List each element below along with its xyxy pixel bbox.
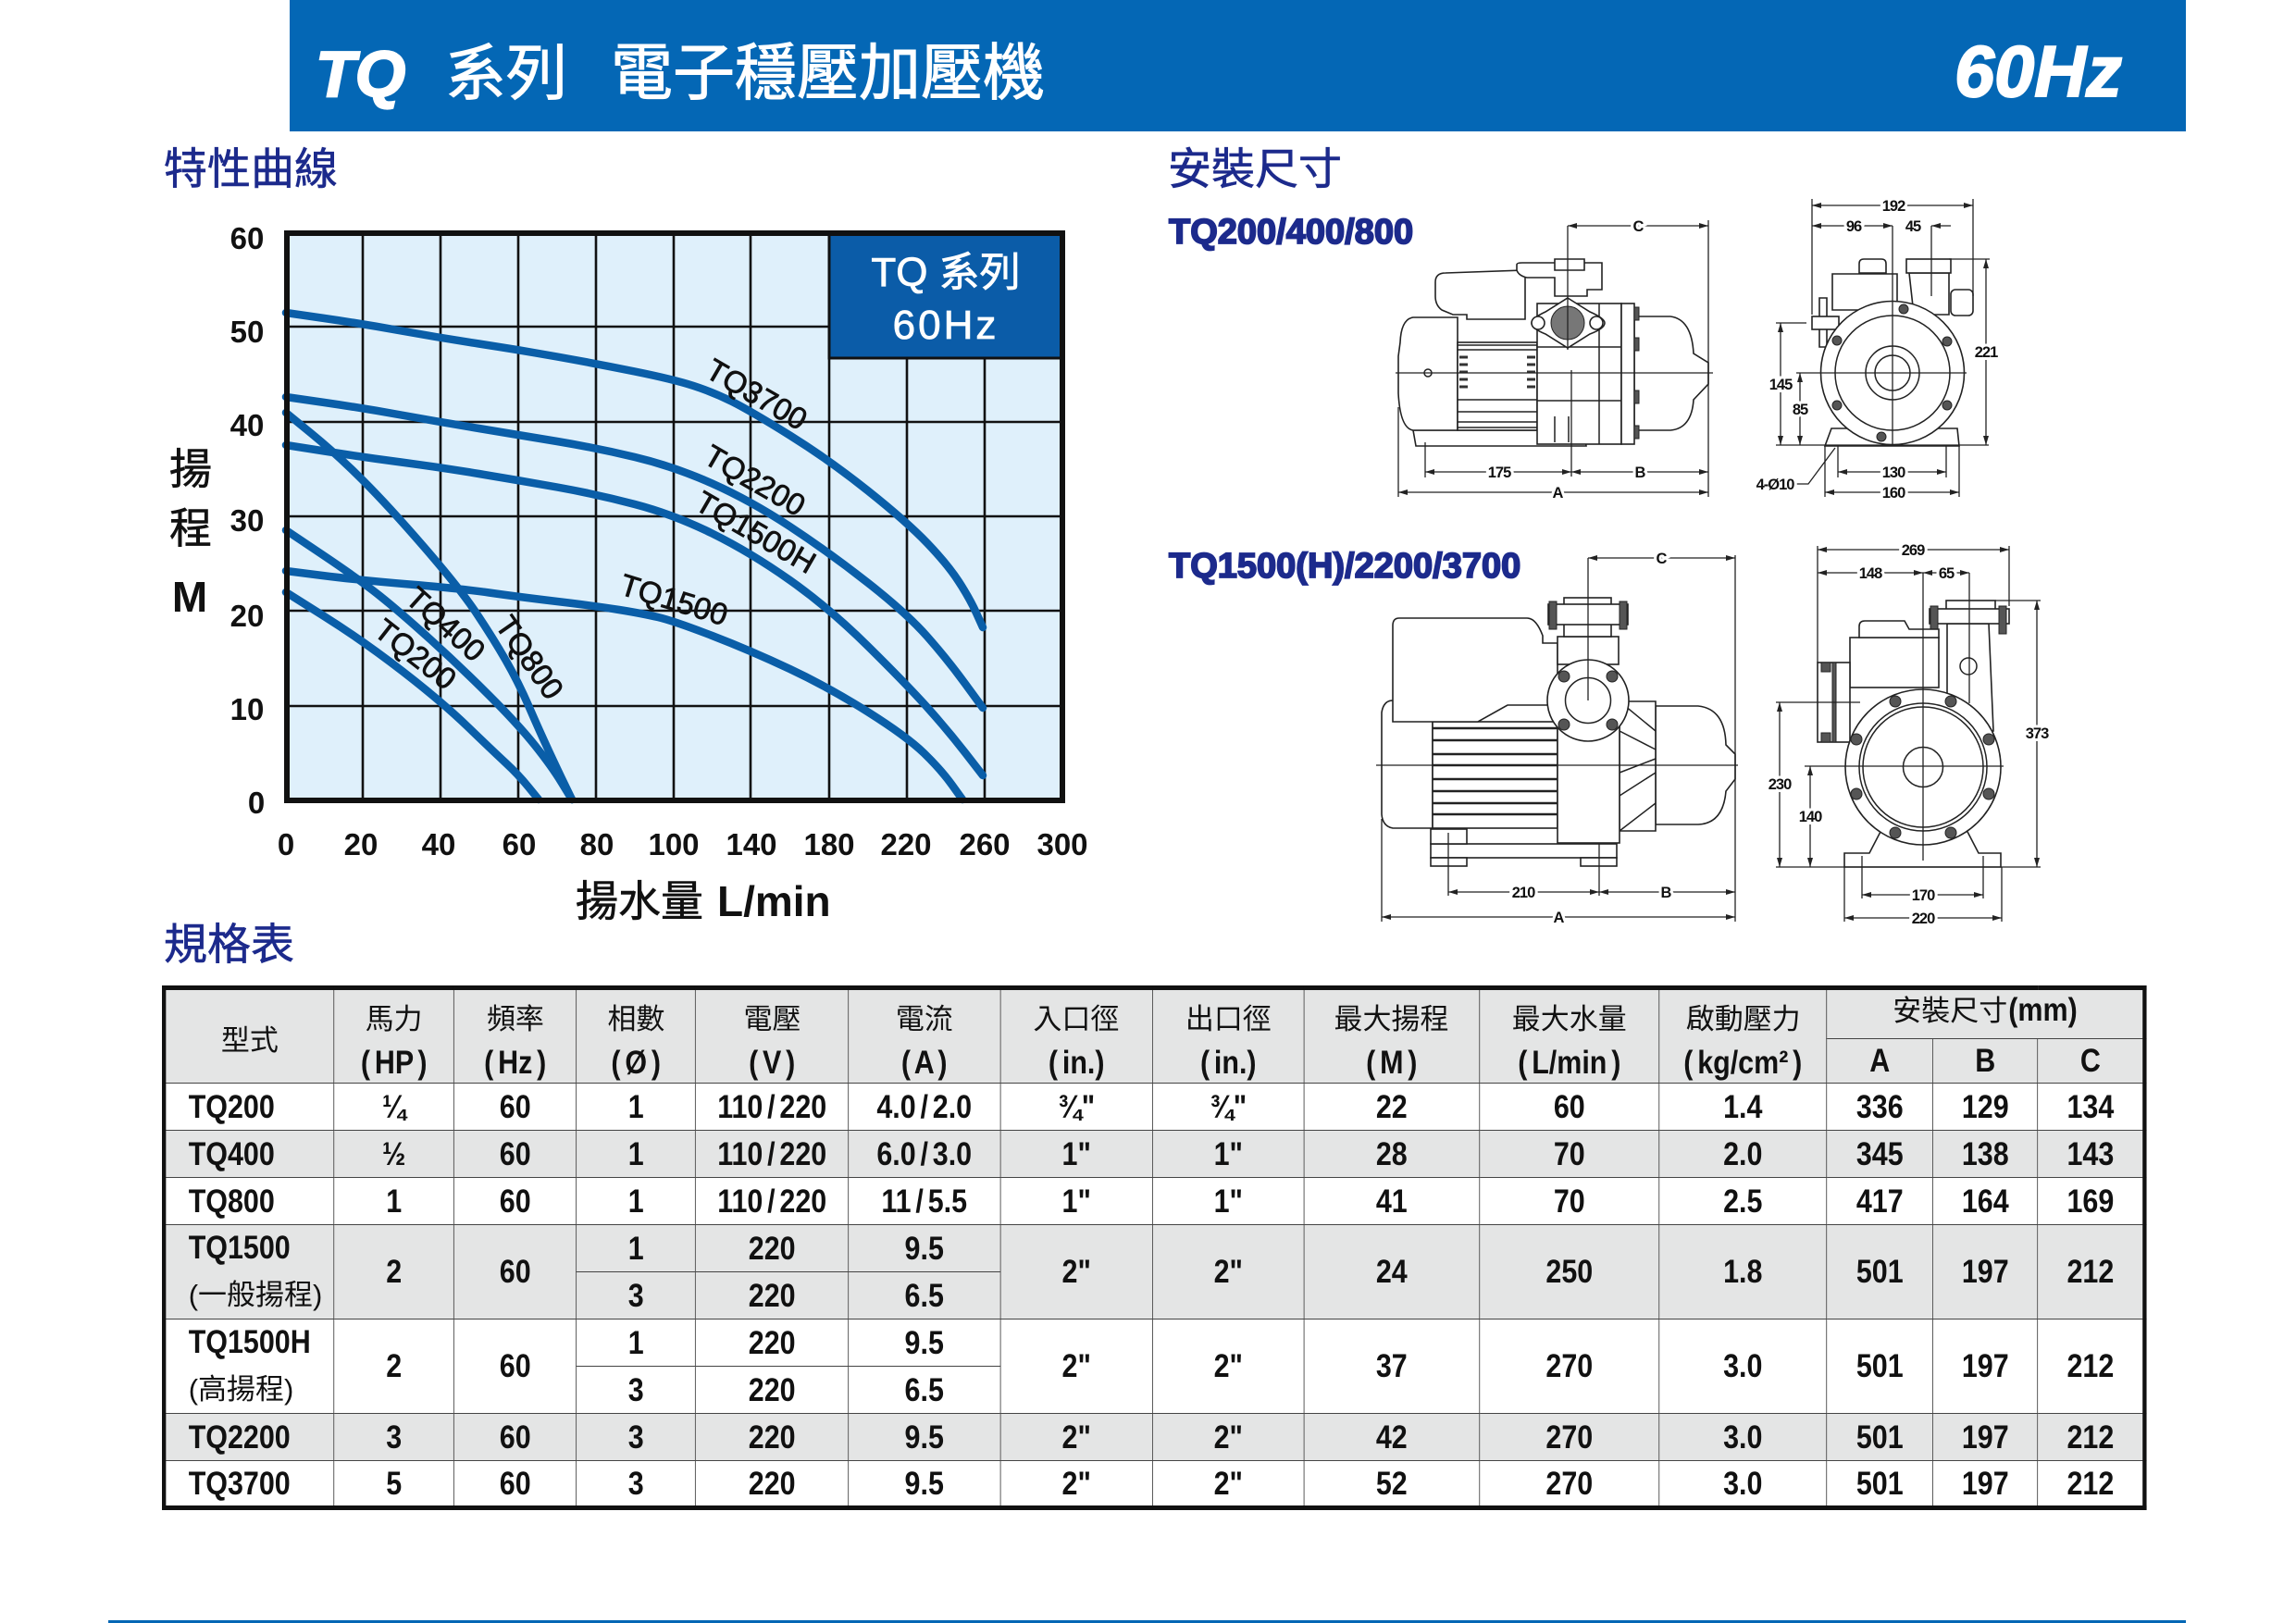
- y axis ticks: 0: [248, 786, 265, 820]
- row: TQ200: ¾": [1058, 1088, 1095, 1125]
- row: TQ3700: 197: [1962, 1466, 2009, 1501]
- row: TQ1500: [167, 1225, 2142, 1319]
- row: TQ800: 41: [1376, 1183, 1408, 1220]
- header banner: 60Hz: [1955, 32, 2122, 112]
- axis lines: [1805, 573, 2004, 861]
- row: TQ3700: 220: [749, 1466, 796, 1501]
- axis lines: [1376, 558, 1738, 896]
- row: TQ2200: 212: [2066, 1419, 2114, 1455]
- plot background: [287, 233, 1062, 800]
- row: TQ1500H: 9.5: [905, 1325, 944, 1360]
- table header row: 最大揚程: [1334, 1003, 1449, 1035]
- row: TQ800: TQ800: [189, 1183, 275, 1220]
- row: TQ3700: 212: [2066, 1466, 2114, 1501]
- row: TQ800: 1": [1214, 1183, 1243, 1220]
- dimension lines: B: [1635, 465, 1646, 481]
- y axis ticks: [230, 221, 265, 820]
- row: TQ1500: 60: [500, 1254, 531, 1290]
- table header row: A: [1869, 1043, 1890, 1079]
- pump body outline: [1812, 259, 1973, 446]
- dimension lines: 96: [1846, 218, 1862, 235]
- row: TQ1500: TQ1500: [189, 1230, 291, 1266]
- row: TQ800: 164: [1962, 1183, 2009, 1220]
- dimension lines: 160: [1882, 485, 1905, 502]
- axis lines: [1396, 226, 1713, 477]
- dimension lines: C: [1633, 218, 1644, 235]
- curve labels: [368, 352, 822, 705]
- row: TQ2200: [167, 1414, 2142, 1460]
- x axis title: L/min: [717, 877, 831, 925]
- dimension lines: 4-Ø10: [1756, 477, 1794, 493]
- row: TQ200: 110 / 220: [717, 1088, 826, 1125]
- row: TQ3700: 2": [1062, 1466, 1091, 1501]
- row: TQ400: 138: [1962, 1136, 2009, 1171]
- y axis ticks: 10: [230, 692, 264, 726]
- row: TQ400: 1: [628, 1136, 644, 1171]
- dimension lines: [1756, 198, 1998, 502]
- row: TQ3700: 9.5: [905, 1466, 944, 1501]
- row: TQ1500: 2": [1214, 1254, 1243, 1290]
- drawing: large pump front view: [1769, 542, 2049, 927]
- y axis ticks: 50: [230, 315, 264, 349]
- table header row: 6.5: [905, 1371, 944, 1408]
- pump body outline: [1398, 259, 1708, 446]
- row: TQ3700: 5: [386, 1466, 402, 1501]
- specification table: [162, 985, 2147, 1510]
- curve: TQ400: [286, 530, 572, 799]
- row: TQ2200: 501: [1856, 1419, 1904, 1455]
- table header row: ( M ): [1366, 1044, 1417, 1081]
- row: TQ1500H: 3.0: [1723, 1348, 1762, 1384]
- row: TQ2200: 60: [500, 1419, 531, 1455]
- table header row: [167, 990, 2142, 1501]
- table header row: 最大水量: [1512, 1003, 1627, 1035]
- dimension lines: [1398, 218, 1708, 502]
- row: TQ1500H: 37: [1376, 1348, 1408, 1384]
- header banner: 電子穩壓加壓機: [611, 39, 1045, 108]
- x axis ticks: 60: [503, 827, 536, 861]
- heading: performance curves: 特性曲線: [164, 144, 338, 193]
- heading: specification table: 規格表: [164, 920, 294, 969]
- drawing: small pump front view: [1756, 198, 1998, 502]
- row: TQ800: 1: [386, 1183, 402, 1220]
- row: TQ3700: TQ3700: [189, 1466, 291, 1501]
- x axis ticks: 20: [344, 827, 378, 861]
- row: TQ400: 2.0: [1723, 1136, 1762, 1171]
- x axis ticks: 80: [580, 827, 614, 861]
- row: TQ200: 22: [1376, 1088, 1408, 1125]
- y axis ticks: 40: [230, 408, 264, 442]
- flange bolts: [1851, 696, 1994, 838]
- row: TQ3700: 270: [1545, 1466, 1593, 1501]
- row: TQ800: 169: [2066, 1183, 2114, 1220]
- table header row: 220: [749, 1277, 796, 1314]
- x axis title: [576, 877, 831, 925]
- drawing: large pump side view: [1376, 551, 1738, 926]
- row: TQ800: 1: [628, 1183, 644, 1220]
- row: TQ3700: 3.0: [1723, 1466, 1762, 1501]
- performance curve chart: [169, 221, 1088, 925]
- table header row: ( kg/cm² ): [1683, 1044, 1802, 1081]
- row: TQ2200: 9.5: [905, 1419, 944, 1455]
- row: TQ1500H: 220: [749, 1325, 796, 1360]
- header banner: 系列: [445, 39, 567, 107]
- table header row: 電壓: [743, 1003, 800, 1035]
- x axis ticks: 300: [1036, 827, 1088, 861]
- legend box: [829, 233, 1062, 358]
- row: TQ200: 1.4: [1723, 1088, 1762, 1125]
- plot frame: [287, 233, 1062, 800]
- dimension lines: 175: [1488, 465, 1511, 481]
- row: TQ1500H: 2: [386, 1348, 402, 1384]
- model label: TQ1500(H)/2200/3700: TQ1500(H)/2200/3700: [1169, 547, 1520, 586]
- dimension lines: 65: [1939, 565, 1955, 582]
- row: TQ800: 70: [1554, 1183, 1585, 1220]
- curve labels: TQ200: [368, 612, 463, 697]
- dimension lines: 170: [1912, 887, 1935, 904]
- table header row: 電流: [896, 1003, 953, 1035]
- y axis title: M: [172, 573, 207, 621]
- row: TQ1500: 220: [749, 1231, 796, 1266]
- header banner: [290, 0, 2186, 131]
- curve: TQ1500: [286, 571, 962, 799]
- dimension lines: 148: [1859, 565, 1882, 582]
- row: TQ800: 2.5: [1723, 1183, 1762, 1220]
- table header row: ( A ): [901, 1044, 948, 1081]
- row: TQ800: 1": [1062, 1183, 1091, 1220]
- curve: TQ3700: [286, 313, 983, 627]
- table header row: 3: [628, 1371, 644, 1408]
- curve labels: TQ1500H: [690, 484, 822, 580]
- row: TQ1500H: TQ1500H: [189, 1324, 311, 1360]
- dimension lines: [1382, 551, 1735, 926]
- row: TQ1500H: 60: [500, 1348, 531, 1384]
- pump body outline: [1818, 601, 2009, 867]
- row: TQ1500: 24: [1376, 1254, 1408, 1290]
- row: TQ2200: 2": [1214, 1419, 1243, 1455]
- row: TQ1500: 501: [1856, 1254, 1904, 1290]
- x axis ticks: [278, 827, 1088, 861]
- row: TQ1500H: 212: [2066, 1348, 2114, 1384]
- row: TQ1500H: 197: [1962, 1348, 2009, 1384]
- row: TQ1500: 2": [1062, 1254, 1091, 1290]
- drawing: small pump side view: [1396, 218, 1713, 502]
- dimension lines: 373: [2026, 725, 2049, 742]
- row: TQ200: ¾": [1210, 1088, 1247, 1125]
- row: TQ400: 110 / 220: [717, 1136, 826, 1171]
- dimension lines: A: [1553, 485, 1564, 502]
- x axis ticks: 40: [422, 827, 455, 861]
- row: TQ1500: 250: [1545, 1254, 1593, 1290]
- curve labels: TQ1500: [616, 567, 732, 632]
- row: TQ3700: 52: [1376, 1466, 1408, 1501]
- row: TQ1500H: 2": [1214, 1348, 1243, 1384]
- x axis ticks: 180: [803, 827, 855, 861]
- row: TQ400: 345: [1856, 1136, 1904, 1171]
- x axis ticks: 140: [726, 827, 777, 861]
- row: TQ2200: 3.0: [1723, 1419, 1762, 1455]
- row: TQ1500: 197: [1962, 1254, 2009, 1290]
- table header row: ( Hz ): [484, 1044, 546, 1081]
- dimension lines: A: [1554, 910, 1565, 926]
- x axis title: 揚水量: [576, 877, 703, 925]
- table header row: 安裝尺寸: [1893, 995, 2008, 1027]
- table header row: ( L/min ): [1518, 1044, 1620, 1081]
- footer rule: [108, 1620, 2186, 1623]
- flange bolts: [1832, 304, 1952, 441]
- row: TQ800: 110 / 220: [717, 1183, 826, 1220]
- curve labels: TQ2200: [699, 438, 812, 523]
- curve labels: TQ400: [400, 580, 492, 668]
- legend box: 60Hz: [893, 303, 999, 348]
- y axis title: 揚: [169, 445, 212, 493]
- y axis ticks: 60: [230, 221, 264, 255]
- row: TQ1500H: 2": [1062, 1348, 1091, 1384]
- dimension lines: 221: [1975, 344, 1998, 361]
- curve: TQ800: [286, 413, 572, 799]
- row: TQ1500: 2: [386, 1254, 402, 1290]
- row: TQ400: 1": [1062, 1136, 1091, 1171]
- row: TQ2200: 3: [628, 1419, 644, 1455]
- curve: TQ2200: [286, 397, 983, 708]
- row: TQ400: 70: [1554, 1136, 1585, 1171]
- row: TQ1500H: [189, 1324, 2114, 1406]
- row: TQ2200: 270: [1545, 1419, 1593, 1455]
- table header row: ( V ): [749, 1044, 795, 1081]
- table header row: (高揚程): [189, 1373, 293, 1406]
- heading: installation dimensions: 安裝尺寸: [1168, 144, 1342, 193]
- dimension lines: 85: [1793, 402, 1808, 418]
- row: TQ1500H: 1: [628, 1325, 644, 1360]
- row: TQ800: 417: [1856, 1183, 1904, 1220]
- row: TQ2200: TQ2200: [189, 1419, 291, 1455]
- pump body outline: [1382, 598, 1735, 866]
- dimension lines: 192: [1882, 198, 1905, 215]
- row: TQ400: 28: [1376, 1136, 1408, 1171]
- row: TQ400: TQ400: [189, 1136, 275, 1171]
- axis lines: [1796, 226, 1967, 446]
- curve labels: TQ800: [489, 609, 571, 705]
- row: TQ1500H: 270: [1545, 1348, 1593, 1384]
- dimension lines: 130: [1882, 465, 1905, 481]
- row: TQ800: 60: [500, 1183, 531, 1220]
- row: TQ1500: 1: [628, 1231, 644, 1266]
- curve labels: TQ3700: [701, 352, 813, 437]
- row: TQ200: 134: [2066, 1088, 2114, 1125]
- row: TQ200: 4.0 / 2.0: [876, 1088, 972, 1125]
- row: TQ1500: 9.5: [905, 1231, 944, 1266]
- row: TQ400: ½: [382, 1136, 405, 1171]
- row: TQ800: [189, 1183, 2114, 1220]
- table header row: C: [2080, 1043, 2101, 1079]
- row: TQ1500H: 501: [1856, 1348, 1904, 1384]
- dimension lines: B: [1661, 885, 1672, 901]
- dimension lines: [1769, 542, 2049, 927]
- row: TQ2200: 2": [1062, 1419, 1091, 1455]
- table header row: 3: [628, 1277, 644, 1314]
- header banner: TQ: [316, 38, 405, 110]
- row: TQ200: 60: [500, 1088, 531, 1125]
- row: TQ3700: [189, 1466, 2114, 1501]
- table header row: ( in.): [1049, 1044, 1105, 1081]
- row: TQ200: [189, 1088, 2114, 1125]
- table header row: (mm): [2008, 992, 2078, 1028]
- x axis ticks: 0: [278, 827, 294, 861]
- dimension lines: 230: [1769, 776, 1792, 793]
- row: TQ2200: 42: [1376, 1419, 1408, 1455]
- row: TQ200: 129: [1962, 1088, 2009, 1125]
- row: TQ2200: 3: [386, 1419, 402, 1455]
- row: TQ200: ¼: [382, 1088, 405, 1125]
- row: TQ400: 143: [2066, 1136, 2114, 1171]
- dimension lines: 45: [1905, 218, 1921, 235]
- y axis title: 程: [169, 504, 212, 552]
- dimension lines: 269: [1902, 542, 1925, 559]
- table header row: (一般揚程): [189, 1279, 322, 1311]
- table header row: 入口徑: [1034, 1003, 1120, 1035]
- table header row: ( HP ): [361, 1044, 428, 1081]
- curve: TQ1500H: [286, 445, 983, 775]
- table header row: 型式: [221, 1024, 279, 1057]
- row: TQ2200: 220: [749, 1419, 796, 1455]
- row: TQ200: TQ200: [189, 1088, 275, 1125]
- table header row: 相數: [607, 1003, 664, 1035]
- row: TQ200: 60: [1554, 1088, 1585, 1125]
- model label: TQ200/400/800: TQ200/400/800: [1169, 213, 1413, 252]
- row: TQ3700: 501: [1856, 1466, 1904, 1501]
- table header row: B: [1975, 1043, 1995, 1079]
- table header row: 出口徑: [1185, 1003, 1272, 1035]
- table header row: 馬力: [366, 1003, 423, 1035]
- table header row: ( Ø ): [611, 1044, 661, 1081]
- dimension lines: 145: [1769, 377, 1793, 393]
- row: TQ400: 1": [1214, 1136, 1243, 1171]
- dimension lines: 140: [1799, 809, 1822, 825]
- row: TQ1500: 212: [2066, 1254, 2114, 1290]
- table header row: 220: [749, 1371, 796, 1408]
- dimension lines: 210: [1512, 885, 1535, 901]
- row: TQ200: 336: [1856, 1088, 1904, 1125]
- table header row: 6.5: [905, 1277, 944, 1314]
- row: TQ1500: 1.8: [1723, 1254, 1762, 1290]
- row: TQ3700: 2": [1214, 1466, 1243, 1501]
- dimension lines: 220: [1912, 911, 1935, 927]
- row: TQ800: 11 / 5.5: [881, 1183, 967, 1220]
- x axis ticks: 260: [959, 827, 1011, 861]
- row: TQ400: 6.0 / 3.0: [876, 1136, 972, 1171]
- y axis ticks: 20: [230, 599, 264, 633]
- legend box: TQ 系列: [871, 250, 1021, 295]
- row: TQ200: 1: [628, 1088, 644, 1125]
- dimension lines: C: [1657, 551, 1668, 567]
- table header row: 啟動壓力: [1685, 1003, 1800, 1035]
- row: TQ400: [164, 1131, 2145, 1177]
- x axis ticks: 100: [648, 827, 700, 861]
- flange bolts: [1558, 671, 1618, 730]
- row: TQ3700: 3: [628, 1466, 644, 1501]
- row: TQ3700: 60: [500, 1466, 531, 1501]
- row: TQ2200: 197: [1962, 1419, 2009, 1455]
- table header row: ( in.): [1200, 1044, 1257, 1081]
- row: TQ400: 60: [500, 1136, 531, 1171]
- table header row: 頻率: [487, 1003, 544, 1035]
- curve: TQ200: [286, 592, 539, 799]
- y axis ticks: 30: [230, 503, 264, 538]
- y axis title: [169, 445, 212, 621]
- x axis ticks: 220: [880, 827, 932, 861]
